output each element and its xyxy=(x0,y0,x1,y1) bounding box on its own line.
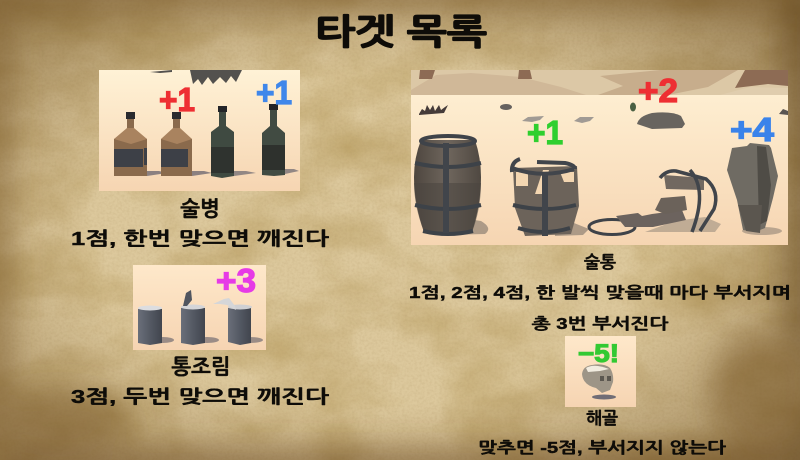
score: +4: +4 xyxy=(730,111,775,148)
panel: skull xyxy=(565,336,636,407)
icon: whisky bottle 2 xyxy=(161,112,212,176)
barrel name: 술통 xyxy=(584,253,616,272)
barrel description line 2: 총 3번 부서진다 xyxy=(532,315,669,333)
icon: can 3 xyxy=(213,298,263,345)
icon: green bottle 1 xyxy=(211,106,256,178)
shrub and rocks xyxy=(419,105,448,115)
title: 타겟 목록 xyxy=(315,13,487,52)
icon: barrel core xyxy=(727,143,782,235)
barrel description line 1: 1점, 2점, 4점, 한 발씩 맞을때 마다 부서지며 xyxy=(409,284,791,302)
icon: green bottle 2 xyxy=(262,104,299,176)
score: +1 red: +1 xyxy=(159,81,195,118)
bottle description: 1점, 한번 맞으면 깨진다 xyxy=(71,228,330,249)
score: +3: +3 xyxy=(216,262,256,299)
panel: bottles xyxy=(99,70,300,191)
score: +1 blue: +1 xyxy=(256,74,292,111)
desert backdrop xyxy=(411,70,788,95)
skull name: 해골 xyxy=(586,409,618,428)
icon: broken barrel xyxy=(589,170,721,234)
icon: intact barrel xyxy=(414,136,488,235)
score: +2: +2 xyxy=(638,72,678,109)
icon: skull xyxy=(582,364,616,400)
score: +1 green: +1 xyxy=(527,114,563,151)
bottle name: 술병 xyxy=(180,198,220,221)
can name: 통조림 xyxy=(171,356,231,379)
icon: damaged barrel xyxy=(512,159,589,236)
panel: cans xyxy=(133,262,266,350)
icon: can 2 xyxy=(181,290,219,345)
can description: 3점, 두번 맞으면 깨진다 xyxy=(71,386,330,407)
icon: whisky bottle 1 xyxy=(114,112,167,176)
skull description: 맞추면 -5점, 부서지지 않는다 xyxy=(478,439,727,457)
panel: barrels xyxy=(411,70,788,245)
icon: can 1 xyxy=(138,306,174,345)
score: -5!: −5! xyxy=(578,340,619,368)
distant shrub xyxy=(150,70,242,85)
